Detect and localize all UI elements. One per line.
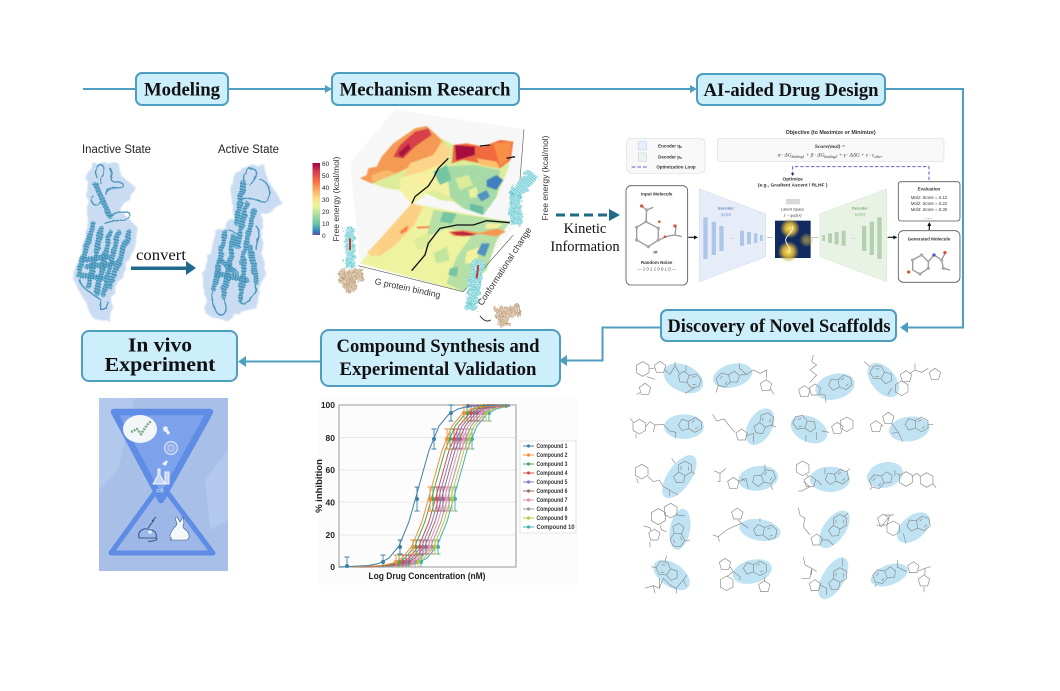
dashed arrow: kinetic information — [556, 209, 620, 221]
background shading — [99, 398, 228, 530]
heading: Compound Synthesis and Experimental Validation: Compound Synthesis and — [336, 337, 540, 357]
evaluation box: ...... — [925, 214, 933, 219]
y tick labels: 40 — [326, 498, 335, 508]
input molecule box: Input Molecule — [641, 191, 673, 196]
objective formula: binding1 — [791, 155, 805, 159]
encoder: ··· — [729, 235, 734, 240]
colorbar: 20 — [322, 209, 330, 216]
mouse icon — [139, 517, 157, 541]
colorbar: 30 — [322, 197, 330, 204]
heading: In vivo Experiment: Experiment — [104, 354, 216, 376]
connector arrow: discovery to synthesis — [559, 328, 661, 366]
evaluation box — [898, 182, 960, 221]
free energy landscape chart — [338, 109, 533, 326]
legend: Compound 3 — [536, 461, 568, 468]
y tick labels: 60 — [326, 465, 335, 475]
optimize label: (e.g., Gradient Ascent / RLHF ) — [758, 183, 828, 189]
label: Inactive State: Inactive State — [82, 144, 151, 156]
generated molecule box — [898, 231, 960, 282]
heading: In vivo Experiment: In vivo — [128, 334, 192, 356]
heading: AI-aided Drug Design — [697, 74, 885, 105]
proteins on corners — [338, 173, 533, 326]
legend: Compound 4 — [536, 470, 568, 477]
dose response chart — [316, 402, 576, 581]
rabbit icon — [170, 517, 189, 540]
lower triangle — [111, 484, 213, 553]
encoder: Encoder — [718, 206, 734, 211]
grid and plot frame — [339, 405, 516, 567]
scaffold highlights — [648, 357, 936, 604]
colorbar: 10 — [322, 221, 330, 228]
lower minimum energy path — [412, 221, 510, 271]
decoder: ··· — [851, 235, 855, 240]
latent space — [767, 199, 818, 262]
chart back walls — [350, 109, 524, 293]
legend: Compound 2 — [536, 452, 568, 459]
molecule skeletons — [630, 355, 941, 595]
heading: Modeling — [136, 73, 228, 105]
in vivo hourglass illustration — [99, 398, 228, 571]
decoder: pₒ(x|z) — [855, 213, 865, 217]
heading: Modeling: Modeling — [144, 80, 220, 100]
axis title: % inhibition: % inhibition — [314, 459, 325, 513]
legend: Compound 6 — [536, 488, 568, 495]
axis label: free energy right: Free energy (kcal/mol) — [540, 135, 550, 221]
heading: Discovery of Novel Scaffolds — [661, 310, 896, 341]
AI drug design diagram — [626, 130, 960, 285]
input molecule box: — 1 0 1 1 0 0 1 0 — — [636, 266, 677, 271]
colorbar — [312, 161, 330, 240]
heading: Discovery of Novel Scaffolds: Discovery of Novel Scaffolds — [668, 316, 890, 337]
legend: Encoder qₒ — [658, 143, 682, 148]
legend — [627, 138, 705, 173]
objective formula — [717, 130, 944, 162]
decoder: Decoder — [852, 206, 868, 211]
chart axes — [358, 129, 524, 292]
objective formula: α · ΔG — [778, 153, 791, 159]
legend: Decoder pₒ — [658, 155, 682, 160]
legend: Compound 8 — [536, 506, 568, 513]
legend: Compound 10 — [536, 524, 575, 531]
evaluation box: Mol2: Score = 0.22 — [911, 201, 948, 206]
connector arrow: synthesis to in vivo — [238, 356, 321, 367]
cell culture icons: 实验 — [156, 487, 164, 493]
label: Kinetic Information: Information — [550, 239, 620, 255]
upper energy surface — [360, 126, 513, 215]
flow arrows — [688, 222, 931, 239]
label: Kinetic Information: Kinetic — [564, 221, 606, 237]
protein: active state — [203, 166, 281, 319]
upper triangle — [114, 412, 210, 500]
legend: Optimization Loop — [656, 165, 696, 170]
evaluation box: Mol3: Score = 0.35 — [911, 207, 948, 212]
objective formula: binding2 — [824, 155, 837, 159]
decoder — [820, 189, 887, 282]
colorbar: 50 — [322, 173, 330, 180]
heading: Mechanism Research — [332, 73, 519, 105]
heading: Mechanism Research: Mechanism Research — [340, 80, 511, 100]
encoder: qₒ(z|x) — [721, 213, 731, 217]
cell culture icons — [123, 415, 178, 493]
heading: In vivo Experiment — [82, 331, 237, 381]
encoder — [699, 189, 766, 282]
y tick labels: 20 — [326, 530, 335, 540]
label: convert: convert — [136, 247, 187, 264]
axis label: Conformational change: Conformational change — [476, 225, 534, 307]
lower energy projection — [360, 203, 510, 292]
objective formula: Objective (to Maximize or Minimize) — [786, 130, 876, 136]
legend: Compound 9 — [536, 515, 568, 522]
y tick labels: 0 — [330, 562, 335, 572]
latent space: z ~ qₒ(z|x) — [783, 212, 802, 217]
objective formula: + γ · ΔΔG + ε · c — [837, 153, 875, 159]
heading: Compound Synthesis and Experimental Validation: Experimental Validation — [340, 360, 537, 380]
axis title: Log Drug Concentration (nM): Log Drug Concentration (nM) — [368, 571, 486, 582]
legend: Compound 1 — [536, 443, 568, 450]
evaluation box: Evaluation — [918, 186, 941, 191]
heading: AI-aided Drug Design: AI-aided Drug Design — [704, 80, 879, 101]
objective formula: other — [874, 155, 883, 159]
input molecule box — [626, 186, 688, 285]
objective formula: Score(mol) = — [815, 143, 845, 150]
legend — [520, 441, 576, 533]
label: Active State: Active State — [218, 144, 279, 156]
workflow connector: top line — [83, 85, 963, 333]
upper minimum energy path — [412, 145, 515, 204]
axis label: free energy left: Free energy (kcal/mol) — [331, 156, 341, 242]
protein: inactive state — [74, 163, 135, 320]
axis label: G protein binding: G protein binding — [374, 276, 442, 300]
heading: Compound Synthesis and Experimental Validation — [321, 330, 560, 386]
colorbar: 0 — [322, 233, 326, 240]
optimize label: Optimize — [782, 176, 803, 182]
colorbar: 60 — [322, 161, 330, 168]
latent space: Latent Space — [781, 206, 805, 211]
objective formula: + β · ΔG — [805, 153, 824, 159]
generated molecule box: Generated Molecule — [908, 236, 951, 241]
optimization loop dashed line — [791, 167, 929, 182]
legend: Compound 5 — [536, 479, 568, 486]
legend: Compound 7 — [536, 497, 568, 504]
evaluation box: Mol1: Score = 0.12 — [911, 195, 948, 200]
y tick labels: 80 — [326, 433, 335, 443]
molecule grid: novel scaffolds — [630, 355, 941, 604]
dose response curves — [339, 404, 510, 568]
y tick labels: 100 — [321, 400, 335, 410]
arrow: convert — [131, 261, 196, 275]
input molecule box: or — [653, 249, 658, 254]
input molecule box: Random Noise — [641, 260, 673, 265]
colorbar: 40 — [322, 185, 330, 192]
